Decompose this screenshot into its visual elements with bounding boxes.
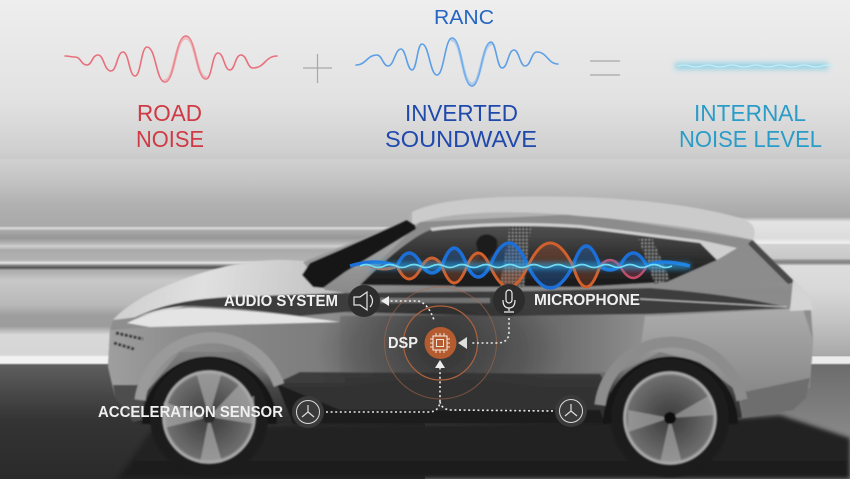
left acceleration sensor icon bbox=[292, 396, 324, 428]
front arch lip bbox=[140, 338, 279, 400]
driver silhouette bbox=[455, 234, 500, 287]
window chrome bbox=[430, 223, 737, 260]
DSP chip icon bbox=[424, 327, 456, 359]
front wheel bbox=[162, 370, 256, 464]
rear arch lip bbox=[600, 342, 742, 405]
roof highlight bbox=[412, 196, 754, 240]
front tire bbox=[150, 358, 268, 476]
inverted soundwave caption: INVERTED bbox=[405, 100, 518, 126]
audio system icon bbox=[348, 285, 380, 317]
RANC heading: RANC bbox=[434, 7, 494, 29]
arrow to DSP from sensors bbox=[435, 360, 445, 368]
rear wheel bbox=[623, 371, 717, 465]
belt dark band bbox=[345, 288, 790, 316]
hood dark crease bbox=[130, 293, 345, 320]
arrow to audio system bbox=[381, 296, 389, 306]
DSP inner ring bbox=[404, 306, 478, 380]
dotted connector lines bbox=[326, 301, 553, 412]
DSP label: DSP bbox=[388, 335, 418, 352]
equals sign bbox=[590, 61, 620, 75]
hood bbox=[113, 260, 345, 320]
door panel bbox=[340, 314, 660, 378]
right acceleration sensor icon bbox=[555, 395, 587, 427]
internal noise level caption: NOISE LEVEL bbox=[679, 126, 822, 152]
car bbox=[108, 196, 813, 477]
road noise waveform bbox=[65, 36, 277, 82]
inverted soundwave caption: SOUNDWAVE bbox=[385, 126, 537, 152]
acceleration sensor label: ACCELERATION SENSOR bbox=[98, 404, 283, 421]
front bumper lower bbox=[113, 385, 145, 422]
system diagram bbox=[98, 284, 640, 428]
rear pillar mesh bbox=[638, 237, 670, 284]
sill bbox=[277, 384, 605, 424]
internal noise level caption: INTERNAL bbox=[694, 100, 806, 126]
side windows bbox=[360, 225, 717, 287]
microphone label: MICROPHONE bbox=[534, 292, 640, 309]
rear wheel arch bbox=[603, 356, 738, 424]
rear glass strip bbox=[748, 240, 795, 284]
inverted soundwave caption bbox=[385, 100, 537, 152]
rear character line bbox=[640, 299, 787, 307]
noise wave inside cabin bbox=[350, 243, 690, 288]
DSP outer ring bbox=[384, 287, 496, 399]
door dark vignette bbox=[315, 282, 565, 418]
rear tire bbox=[611, 359, 729, 477]
tail light highlight bbox=[790, 280, 813, 311]
front pillar mesh bbox=[500, 226, 531, 287]
audio system label: AUDIO SYSTEM bbox=[224, 293, 338, 310]
windshield bbox=[302, 220, 416, 288]
microphone icon bbox=[493, 284, 525, 316]
hood white crease bbox=[127, 308, 340, 327]
blue wave lobes bbox=[350, 243, 690, 288]
rear bumper bbox=[740, 378, 810, 418]
cyan residual line bbox=[360, 264, 672, 268]
red wave lobes bbox=[600, 260, 647, 278]
internal noise level caption bbox=[679, 100, 822, 152]
orange wave lobes bbox=[370, 243, 600, 287]
cyan glow bbox=[370, 263, 690, 269]
plus sign bbox=[303, 54, 332, 83]
greenhouse band bbox=[350, 214, 793, 292]
rear quarter bbox=[640, 300, 813, 416]
headlight bbox=[114, 333, 143, 349]
lower door shade bbox=[277, 372, 612, 424]
car body bbox=[108, 196, 813, 424]
arrow to DSP from microphone bbox=[458, 337, 467, 349]
front wheel arch bbox=[142, 356, 277, 424]
road noise caption bbox=[136, 100, 204, 152]
road noise caption: ROAD bbox=[137, 100, 202, 126]
internal noise waveform bbox=[675, 63, 834, 69]
belt light strip bbox=[380, 298, 490, 303]
front fender bbox=[108, 322, 345, 397]
road noise caption: NOISE bbox=[136, 126, 204, 152]
ground shadow bbox=[118, 415, 850, 479]
inverted soundwave waveform bbox=[356, 38, 558, 86]
